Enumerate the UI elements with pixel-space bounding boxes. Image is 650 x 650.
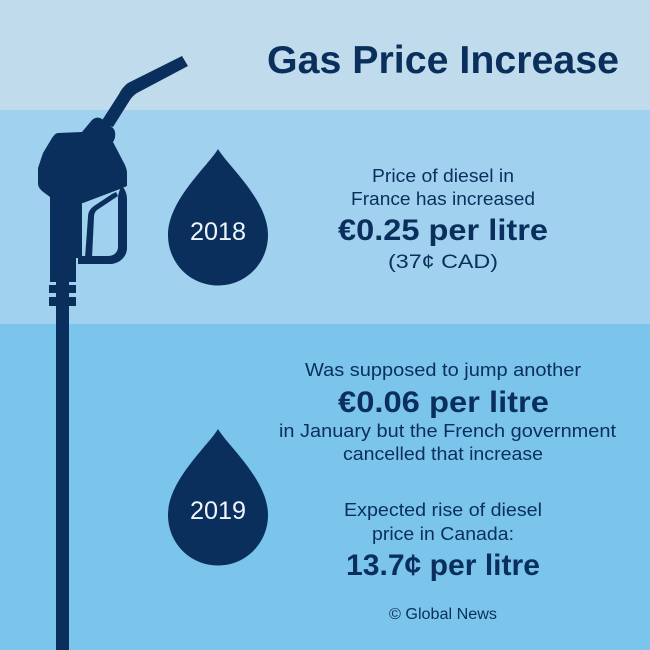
text block: 2018 diesel in France: €0.25 per litre — [338, 214, 548, 247]
text block: expected rise in Canada: 13.7¢ per litre — [346, 549, 540, 582]
text block: 2018 diesel in France — [338, 165, 548, 273]
text block: 2019 France increase cancelled — [279, 359, 616, 464]
text block: 2018 diesel in France: Price of diesel in — [372, 165, 514, 186]
text block: expected rise in Canada: price in Canada: — [372, 523, 514, 544]
text block: 2019 France increase cancelled: in January but the French government — [279, 420, 616, 441]
year label 2019: 2019 — [190, 497, 246, 525]
text block: 2019 France increase cancelled: €0.06 per litre — [338, 386, 549, 419]
icon: 2019 drop — [168, 429, 268, 566]
icon: fuel pump nozzle — [38, 56, 188, 650]
icon: 2018 drop — [168, 149, 268, 286]
text block: 2018 diesel in France: France has increased — [351, 188, 535, 209]
title: Gas Price Increase — [267, 39, 619, 82]
year label 2018: 2018 — [190, 218, 246, 246]
text block: 2019 France increase cancelled: Was supposed to jump another — [305, 359, 581, 380]
text block: 2018 diesel in France: (37¢ CAD) — [388, 252, 498, 273]
text block: expected rise in Canada: Expected rise of diesel — [344, 499, 542, 520]
text block: 2019 France increase cancelled: cancelled that increase — [343, 443, 543, 464]
source credit: © Global News — [389, 606, 497, 623]
text block: expected rise in Canada — [344, 499, 542, 582]
